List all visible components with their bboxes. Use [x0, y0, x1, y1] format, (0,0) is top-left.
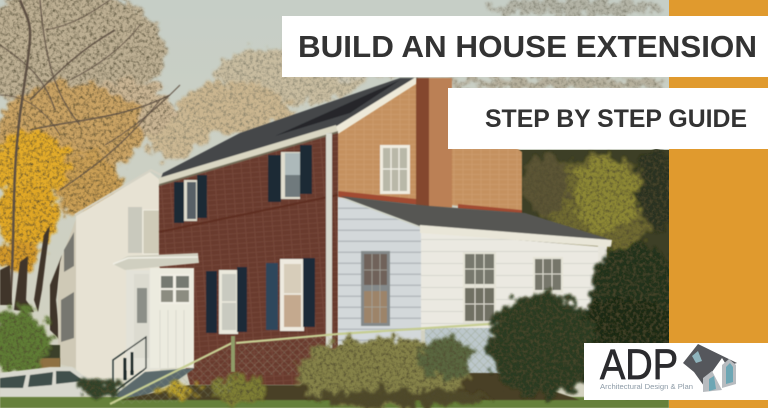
logo wordmark: ADP — [600, 341, 678, 389]
porch walls — [126, 270, 194, 370]
extension — [338, 196, 612, 345]
porch steps — [115, 368, 195, 404]
extension right siding — [421, 232, 604, 330]
porch roof — [113, 253, 199, 270]
neighbour shutter — [128, 207, 142, 253]
lower windows and shutters — [206, 258, 315, 334]
main roof — [159, 77, 418, 187]
left extension window — [361, 251, 390, 326]
neighbour side windows — [61, 232, 74, 342]
middle extension window — [463, 252, 496, 323]
small green tree left — [0, 309, 60, 375]
neighbour main wall — [76, 172, 160, 378]
logo icon: house — [683, 344, 737, 392]
extension roof — [340, 196, 612, 240]
porch railing — [113, 337, 146, 393]
dark hedge — [488, 244, 683, 397]
logo panel — [584, 341, 768, 400]
chain-link fence — [110, 324, 508, 404]
upper windows and shutters — [174, 145, 312, 223]
ground and low shrubs — [0, 345, 669, 408]
left autumn tree — [0, 0, 180, 340]
title text: BUILD AN HOUSE EXTENSION — [298, 29, 757, 64]
centre shrub — [297, 336, 490, 408]
chimney — [416, 78, 430, 208]
neighbour window — [143, 210, 160, 254]
front porch — [113, 253, 199, 404]
porch window — [160, 274, 190, 304]
driveway car — [0, 367, 92, 398]
porch door — [134, 274, 149, 358]
logo tagline: Architectural Design & Plan — [600, 382, 693, 391]
right dark trees — [515, 148, 673, 350]
subtitle text: STEP BY STEP GUIDE — [485, 105, 747, 133]
orange side band — [669, 0, 768, 408]
brick band — [338, 191, 522, 214]
extension fascia — [420, 225, 612, 247]
right extension window — [533, 257, 563, 293]
white neighbouring house — [58, 170, 163, 378]
gable window — [380, 145, 410, 194]
neighbour side wall — [58, 216, 77, 368]
title banner — [282, 16, 768, 77]
back gable brick wall — [336, 78, 522, 214]
background trees behind the roof — [145, 0, 670, 159]
downpipe — [326, 133, 332, 348]
front brick wall — [159, 133, 338, 385]
extension left siding — [338, 197, 421, 345]
roof trim — [335, 77, 416, 134]
subtitle banner — [448, 88, 768, 149]
